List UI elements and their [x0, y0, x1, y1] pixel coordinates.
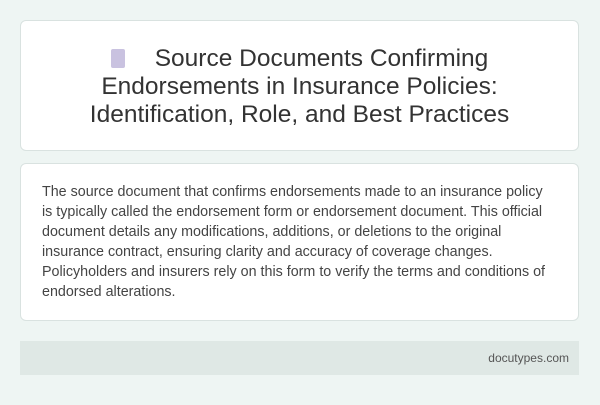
footer text: docutypes.com	[488, 351, 569, 365]
title: Source Documents Confirming Endorsements in Insurance Policies: Identification, Role, and Best Practices	[90, 45, 509, 128]
panel: title	[20, 20, 579, 151]
panel: description	[20, 163, 579, 321]
footer	[20, 341, 579, 375]
text block: The source document that confirms endorsements made to an insurance policy is typically called the endorsement form or endorsement document. This official document details any modifications, additions, or deletions to the original insurance contract, ensuring clarity and accuracy of coverage changes. Policyholders and insurers rely on this form to verify the terms and conditions of endorsed alterations.	[42, 184, 545, 300]
icon: document	[111, 49, 125, 68]
